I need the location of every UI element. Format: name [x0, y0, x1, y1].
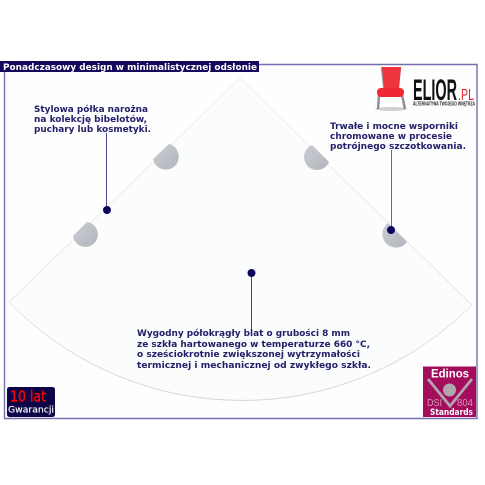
frame [4, 64, 477, 418]
icon: red chair [375, 67, 407, 111]
badge: Edinos standards: Edinos [431, 366, 469, 380]
bracket: top left [153, 144, 179, 170]
callout: top surface text: Wygodny półokrągły blat o grubości 8 mm [137, 328, 350, 339]
bracket: right [382, 223, 407, 248]
logo: Elior [375, 67, 475, 111]
callout: shelf text: Stylowa półka narożna [34, 104, 148, 115]
callout: brackets text [330, 122, 466, 152]
callout: brackets text: Trwałe i mocne wsporniki [330, 122, 458, 132]
callout: top surface text: termicznej i mechanicznej od zwykłego szkła. [137, 361, 371, 371]
badge: Edinos standards: Standards [430, 408, 473, 418]
badge: 10 years warranty: 10 lat [10, 388, 46, 406]
badge: 10 years warranty [7, 387, 55, 417]
callout marker: left [103, 133, 111, 214]
callout: top surface text: o sześciokrotnie zwiększonej wytrzymałości [137, 349, 360, 360]
callout: brackets text: chromowane w procesie [330, 132, 452, 142]
glass shelf [9, 78, 472, 400]
logo: Elior: .PL [458, 87, 474, 104]
badge: Edinos standards: 804 [457, 397, 473, 409]
callout: brackets text: potrójnego szczotkowania. [330, 141, 466, 152]
title bar: Ponadczasowy design w minimalistycznej odsłonie [3, 63, 257, 73]
callout marker: right [387, 150, 395, 234]
callout: top surface text [137, 328, 371, 371]
bracket: top right [304, 145, 329, 170]
badge: Edinos standards [423, 366, 476, 418]
bracket: left [73, 222, 98, 247]
callout: shelf text [34, 104, 151, 135]
callout marker: centre [248, 269, 256, 330]
callout: top surface text: ze szkła hartowanego w temperaturze 660 °C, [137, 340, 370, 350]
badge: 10 years warranty: Gwarancji [8, 406, 54, 416]
callout: shelf text: na kolekcję bibelotów, [34, 114, 147, 125]
badge: Edinos standards: DSI [427, 397, 442, 409]
callout: shelf text: puchary lub kosmetyki. [34, 125, 151, 135]
